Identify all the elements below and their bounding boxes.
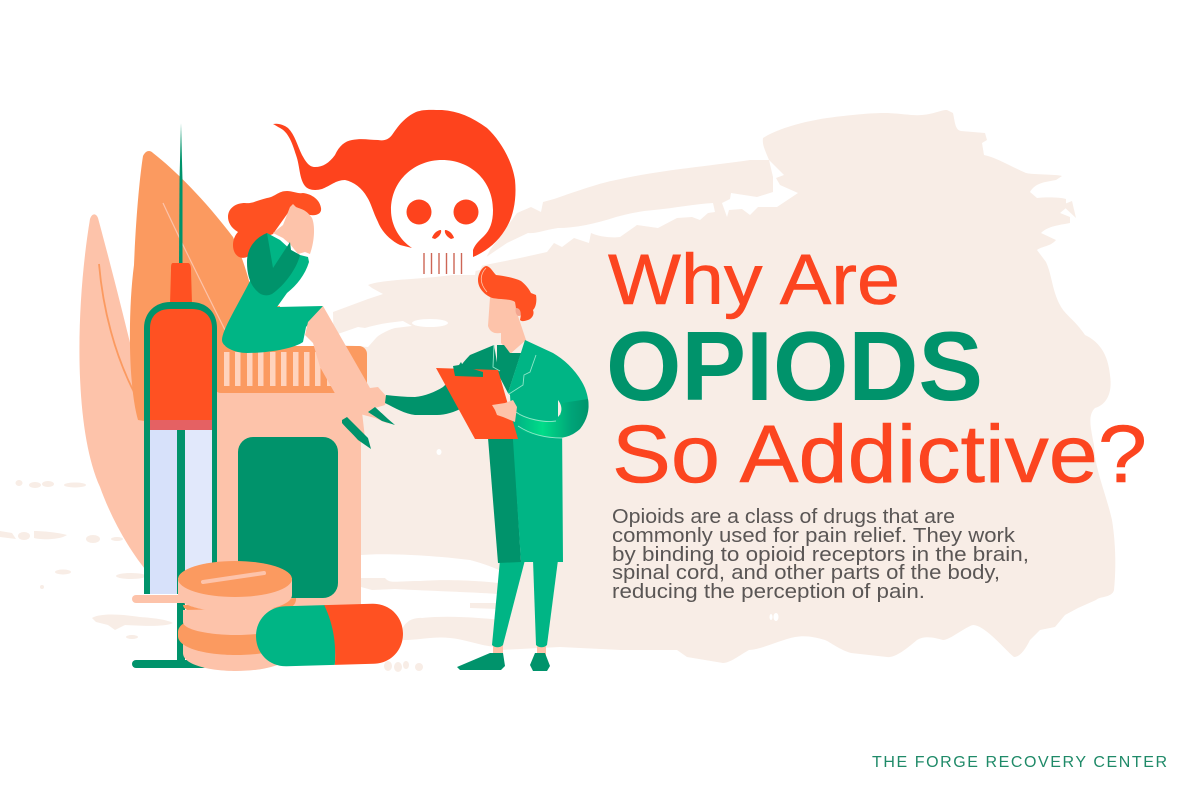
medicine band xyxy=(150,420,212,430)
syringe xyxy=(132,123,217,668)
plunger rod xyxy=(177,603,185,663)
title line 3: So Addictive? xyxy=(612,409,1147,500)
description paragraph: commonly used for pain relief. They work xyxy=(612,525,1016,547)
sleeve shadow xyxy=(247,233,300,295)
leaf: peach xyxy=(79,214,180,575)
cap ridges xyxy=(224,352,332,386)
trousers xyxy=(492,560,525,647)
pill stack xyxy=(178,561,296,671)
plunger base xyxy=(132,660,207,668)
skull with flame xyxy=(273,110,516,275)
hub xyxy=(170,263,192,304)
dress xyxy=(222,233,323,353)
medicine bottle xyxy=(213,346,367,645)
middle tablet xyxy=(183,598,296,618)
description paragraph: by binding to opioid receptors in the brain, xyxy=(612,544,1029,566)
elbow gap xyxy=(558,400,561,417)
clipboard clip xyxy=(453,362,483,377)
hand xyxy=(492,400,517,422)
face and hands xyxy=(273,204,314,254)
title line 1: Why Are xyxy=(608,241,900,320)
forearm xyxy=(516,399,589,438)
bottle label xyxy=(238,437,338,598)
ear xyxy=(516,304,522,316)
neck and face xyxy=(488,297,526,354)
skull white shape xyxy=(391,160,493,275)
leaves xyxy=(79,151,280,575)
thigh and leg xyxy=(305,306,387,438)
hair xyxy=(228,191,321,258)
title xyxy=(606,241,1147,500)
doctor xyxy=(385,266,589,671)
ankles xyxy=(493,645,503,655)
far leg xyxy=(342,360,389,424)
coat main xyxy=(508,340,588,562)
bottle body xyxy=(217,390,361,645)
flame xyxy=(273,110,516,257)
eyes xyxy=(406,200,432,224)
footer brand: THE FORGE RECOVERY CENTER xyxy=(872,754,1167,771)
needle xyxy=(179,123,182,265)
capsule green half xyxy=(255,605,336,667)
coat shadow panel xyxy=(488,430,521,563)
shoes xyxy=(457,653,505,670)
hair xyxy=(478,266,536,321)
capsule xyxy=(255,603,404,667)
top tablet xyxy=(178,578,292,612)
tablet score xyxy=(203,573,264,582)
description paragraph: spinal cord, and other parts of the body, xyxy=(612,562,1000,584)
bottle cap xyxy=(213,346,367,393)
nose xyxy=(432,230,441,239)
background paint splash xyxy=(0,110,1115,672)
description paragraph xyxy=(612,506,1029,603)
title line 2: OPIODS xyxy=(606,311,983,421)
hair highlight xyxy=(481,268,487,292)
teeth xyxy=(424,253,462,274)
glass right xyxy=(185,430,212,594)
shoe xyxy=(342,417,371,449)
barrel outline xyxy=(144,302,217,594)
glass left xyxy=(150,430,177,594)
outstretched arm xyxy=(385,345,500,415)
shoe xyxy=(368,407,395,425)
capsule red half xyxy=(324,603,404,665)
leaf vein xyxy=(99,264,134,392)
medicine xyxy=(150,309,212,421)
coat lapel lines xyxy=(493,345,536,394)
flange xyxy=(132,595,192,603)
bottom tablet xyxy=(183,640,290,671)
description paragraph: Opioids are a class of drugs that are xyxy=(612,506,955,528)
description paragraph: reducing the perception of pain. xyxy=(612,581,925,603)
clipboard xyxy=(436,368,518,439)
woman sitting xyxy=(222,191,395,449)
leaf vein xyxy=(163,203,225,330)
inner shirt xyxy=(497,345,521,393)
sleeve lines xyxy=(516,412,562,438)
leaf: orange xyxy=(130,151,280,430)
